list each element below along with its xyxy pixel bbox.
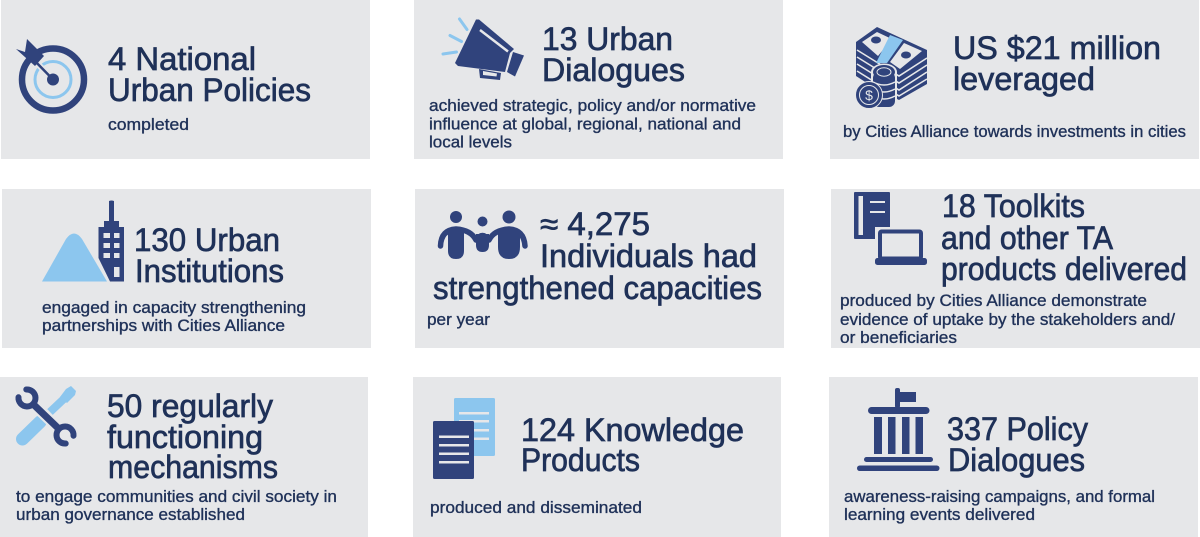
heading: 50 regularly [107, 388, 273, 424]
description: to engage communities and civil society in [16, 488, 337, 506]
description: completed [108, 116, 189, 134]
heading: 18 Toolkits [942, 188, 1085, 224]
heading: 130 Urban [134, 222, 280, 258]
heading [947, 411, 1088, 478]
icon: documents [433, 398, 495, 479]
heading: functioning [107, 419, 263, 455]
heading: products delivered [941, 251, 1187, 287]
heading: Dialogues [948, 442, 1085, 478]
description: awareness-raising campaigns, and formal [844, 488, 1155, 506]
description: partnerships with Cities Alliance [42, 317, 285, 335]
heading: Dialogues [542, 52, 685, 88]
heading [433, 206, 762, 306]
heading [134, 222, 284, 289]
heading: and other TA [941, 220, 1114, 256]
icon: three people [440, 210, 525, 259]
panel: 4 National Urban Policies [1, 0, 370, 159]
icon: target with arrow [16, 39, 84, 110]
description: or beneficiaries [840, 329, 957, 347]
panel: 18 Toolkits [831, 188, 1200, 348]
panel: 130 Urban Institutions [2, 189, 371, 348]
icon: megaphone [443, 19, 524, 80]
heading [521, 412, 744, 478]
description: influence at global, regional, national and [429, 116, 741, 134]
heading [108, 41, 311, 108]
panel: 124 Knowledge Products [413, 377, 781, 537]
icon: mountain and skyscraper [42, 200, 124, 282]
description: per year [427, 311, 491, 329]
description: local levels [429, 134, 512, 152]
icon: institution with flag [857, 388, 940, 471]
heading: 13 Urban [542, 21, 673, 57]
panel: 13 Urban Dialogues [414, 0, 783, 159]
heading: Urban Policies [108, 72, 311, 108]
description: engaged in capacity strengthening [42, 299, 306, 317]
heading: mechanisms [108, 449, 278, 485]
description [16, 488, 337, 524]
description [840, 292, 1175, 347]
description: produced by Cities Alliance demonstrate [840, 292, 1147, 310]
description: achieved strategic, policy and/or normative [429, 97, 756, 115]
heading: leveraged [953, 61, 1095, 97]
heading: Products [521, 442, 640, 478]
description: by Cities Alliance towards investments in cities [843, 123, 1186, 141]
heading [107, 388, 278, 485]
heading: ≈ 4,275 [540, 206, 650, 242]
heading: 4 National [108, 41, 256, 77]
description: produced and disseminated [430, 499, 642, 517]
heading [941, 188, 1187, 287]
heading: Institutions [135, 253, 284, 289]
heading: 124 Knowledge [521, 412, 744, 448]
description: learning events delivered [844, 506, 1035, 524]
heading: 337 Policy [947, 411, 1088, 447]
icon: wrench and screwdriver [18, 386, 76, 444]
heading [953, 30, 1161, 97]
panel: 337 Policy Dialogues [829, 377, 1198, 537]
panel: 4,275 Individuals [415, 189, 784, 348]
icon: money and coins: $ [865, 87, 873, 103]
description: evidence of uptake by the stakeholders and/ [840, 311, 1175, 329]
panel: 50 regularly functioning mechanisms [0, 377, 368, 537]
heading [542, 21, 685, 88]
icon: money and coins [856, 27, 927, 108]
heading: US $21 million [953, 30, 1161, 66]
heading: strengthened capacities [433, 270, 762, 306]
description [844, 488, 1155, 524]
panel: US $21 million leveraged [830, 0, 1199, 159]
icon: document and laptop [854, 192, 927, 265]
description: urban governance established [16, 506, 245, 524]
description [429, 97, 756, 152]
description [42, 299, 306, 335]
heading: Individuals had [540, 238, 757, 274]
